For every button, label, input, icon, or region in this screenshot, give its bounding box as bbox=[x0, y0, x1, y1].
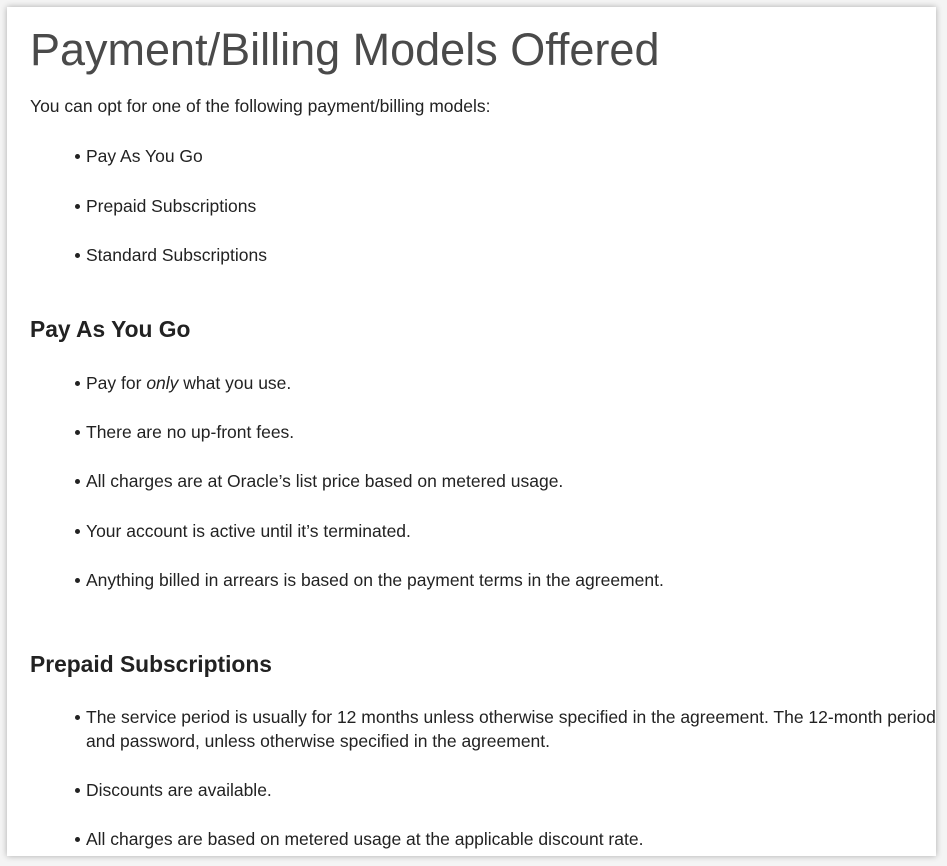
heading: prepaid subscriptions: Prepaid Subscriptions bbox=[30, 651, 272, 677]
model list: Standard Subscriptions bbox=[86, 245, 267, 265]
heading: pay as you go: Pay As You Go bbox=[30, 316, 190, 342]
model list bbox=[75, 146, 267, 265]
list: prepaid subscriptions bbox=[75, 707, 936, 849]
list: pay as you go bbox=[75, 373, 664, 590]
list: pay as you go: Your account is active until it’s terminated. bbox=[86, 521, 411, 541]
list: pay as you go: Anything billed in arrears is based on the payment terms in the agreement. bbox=[86, 570, 664, 590]
model list: Pay As You Go bbox=[86, 146, 203, 166]
list: prepaid subscriptions: and password, unless otherwise specified in the agreement. bbox=[86, 731, 550, 751]
title: Payment/Billing Models Offered bbox=[30, 24, 659, 75]
intro text: You can opt for one of the following payment/billing models: bbox=[30, 96, 490, 116]
model list: Prepaid Subscriptions bbox=[86, 196, 256, 216]
list: prepaid subscriptions: Discounts are available. bbox=[86, 780, 272, 800]
list: pay as you go: Pay for only what you use. bbox=[86, 373, 291, 393]
list: pay as you go: All charges are at Oracle’s list price based on metered usage. bbox=[86, 471, 563, 491]
list: pay as you go: There are no up-front fees. bbox=[86, 422, 294, 442]
list: prepaid subscriptions: All charges are based on metered usage at the applicable discount rate. bbox=[86, 829, 643, 849]
